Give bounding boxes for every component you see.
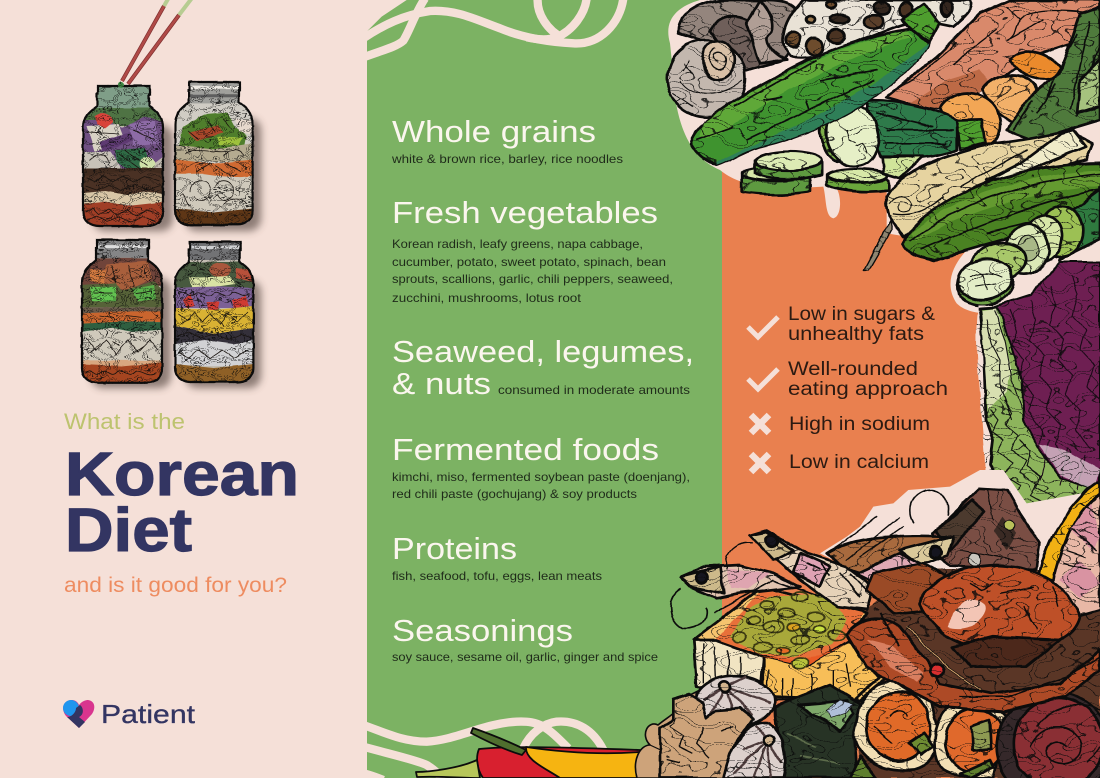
icon: shrimp middle xyxy=(750,530,873,610)
icon: radish xyxy=(863,130,1093,270)
title: Diet: Diet xyxy=(65,496,192,564)
pale leaf rib xyxy=(981,308,1012,410)
group: fermented foods xyxy=(392,432,690,501)
icon: carrots xyxy=(887,0,1100,110)
icon: orange potatoes xyxy=(940,52,1063,147)
cream backing: top vegetables xyxy=(668,0,1100,313)
icon: pink shrimp right xyxy=(1053,493,1100,617)
group: proteins xyxy=(392,531,602,583)
group: seasonings: soy sauce, sesame oil, garlic, ginger and spice xyxy=(392,650,658,664)
group: whole grains: Whole grains xyxy=(392,114,596,149)
item: high in sodium: High in sodium xyxy=(789,414,930,435)
panel: orange pros and cons xyxy=(722,124,1100,778)
icon: crab xyxy=(847,563,1100,712)
icon: cross xyxy=(751,415,769,433)
icon: yellow chilli xyxy=(526,747,640,778)
icon: check xyxy=(748,317,778,337)
group: fresh vegetables: zucchini, mushrooms, lotus root xyxy=(392,291,582,305)
item: well-rounded xyxy=(748,359,948,400)
icon: egg one xyxy=(853,680,940,771)
group: fresh vegetables: Korean radish, leafy greens, napa cabbage, xyxy=(392,237,643,251)
illustration: jar 3 xyxy=(82,240,162,383)
icon: check xyxy=(748,369,778,389)
antenna: back shrimp xyxy=(910,491,948,523)
icon: chilli stem xyxy=(416,760,480,778)
item: well-rounded: Well-rounded xyxy=(788,359,918,380)
icon: beet xyxy=(997,692,1100,778)
group: seaweed legumes nuts xyxy=(392,334,694,401)
item: low in sugars xyxy=(748,304,935,345)
item: low in sugars: Low in sugars & xyxy=(788,304,935,325)
panel: green food groups xyxy=(367,0,722,778)
group: seaweed legumes nuts: Seaweed, legumes, xyxy=(392,334,694,369)
icon: yellow chilli stem xyxy=(471,728,526,755)
icon: tofu block xyxy=(693,587,887,700)
icon: lotus root xyxy=(783,0,971,58)
icon: brown meat xyxy=(933,488,1040,570)
icon: lettuce xyxy=(1007,7,1100,140)
group: fresh vegetables: sprouts, scallions, garlic, chili peppers, seaweed, xyxy=(392,272,673,286)
icon: egg two xyxy=(935,697,1007,778)
decorative ribbon: bottom xyxy=(363,721,603,778)
jar shadows xyxy=(91,118,261,388)
title block xyxy=(64,409,299,597)
illustration: top vegetables xyxy=(667,0,1100,310)
icon: large zucchini xyxy=(691,4,939,166)
subtitle: good for you: and is it good for you? xyxy=(64,574,287,597)
icon: shrimp left xyxy=(671,543,820,628)
group: fermented foods: red chili paste (gochujang) & soy products xyxy=(392,487,637,501)
illustration: chilli peppers xyxy=(416,728,640,778)
group: seasonings xyxy=(392,613,658,664)
icon: far zucchini xyxy=(903,163,1100,260)
group: fresh vegetables: cucumber, potato, sweet potato, spinach, bean xyxy=(392,255,666,269)
icon: mushrooms xyxy=(667,0,801,117)
item: low in sugars: unhealthy fats xyxy=(788,324,924,345)
food groups list xyxy=(391,114,694,664)
icon: white mushroom upper xyxy=(696,676,774,728)
decorative ribbon: top xyxy=(363,0,623,57)
illustration: napa and red cabbage xyxy=(976,262,1100,560)
icon: ginger xyxy=(660,695,755,778)
icon: seaweed xyxy=(775,685,860,778)
icon: white mushroom lower xyxy=(723,723,785,778)
cabbage veins xyxy=(1010,275,1100,490)
icon: cucumber slices row xyxy=(953,190,1100,310)
illustration: jar 4 xyxy=(175,242,253,382)
icon: heart xyxy=(63,700,94,728)
logo wordmark: Patient xyxy=(101,699,196,729)
dark filler under crab xyxy=(847,570,1100,778)
group: proteins: fish, seafood, tofu, eggs, lean meats xyxy=(392,569,602,583)
cream backing: bottom foods xyxy=(820,470,1100,580)
garnish: scallions xyxy=(730,592,847,669)
pros and cons list xyxy=(748,304,948,473)
group: fermented foods: kimchi, miso, fermented soybean paste (doenjang), xyxy=(392,470,690,484)
icon: red cabbage xyxy=(996,262,1100,490)
logo: Patient xyxy=(63,699,196,729)
greens at bottom xyxy=(850,757,877,778)
subtitle: what is the: What is the xyxy=(64,409,185,434)
group: seasonings: Seasonings xyxy=(392,613,573,648)
greens under egg xyxy=(960,760,993,778)
group: whole grains: white & brown rice, barley, rice noodles xyxy=(391,152,623,166)
illustration: ginger root left xyxy=(635,690,720,778)
icon: small zucchini xyxy=(867,100,985,159)
icon: cucumber slices stack xyxy=(742,98,923,194)
illustration: chopsticks xyxy=(122,0,192,84)
leaf ribs xyxy=(986,310,1056,530)
icon: cross xyxy=(751,454,769,472)
icon: red chilli xyxy=(477,747,640,778)
group: fresh vegetables: Fresh vegetables xyxy=(392,195,658,230)
illustration: bottom foods xyxy=(660,482,1100,778)
group: seaweed legumes nuts: & nuts xyxy=(392,366,491,401)
item: well-rounded: eating approach xyxy=(788,379,948,400)
group: fermented foods: Fermented foods xyxy=(392,432,659,467)
item: low in calcium: Low in calcium xyxy=(789,452,929,473)
icon: napa cabbage leaf xyxy=(979,300,1100,538)
group: seaweed legumes nuts: consumed in moderate amounts xyxy=(498,383,690,397)
illustration: jar 2 xyxy=(175,82,253,225)
group: whole grains xyxy=(391,114,623,166)
icon: back shrimp xyxy=(827,517,953,583)
title: Korean: Korean xyxy=(65,440,299,508)
group: proteins: Proteins xyxy=(392,531,517,566)
illustration: jar 1 xyxy=(83,82,163,226)
cream edge xyxy=(976,305,1100,560)
group: fresh vegetables xyxy=(392,195,673,305)
icon: yellow pepper xyxy=(1039,482,1100,582)
